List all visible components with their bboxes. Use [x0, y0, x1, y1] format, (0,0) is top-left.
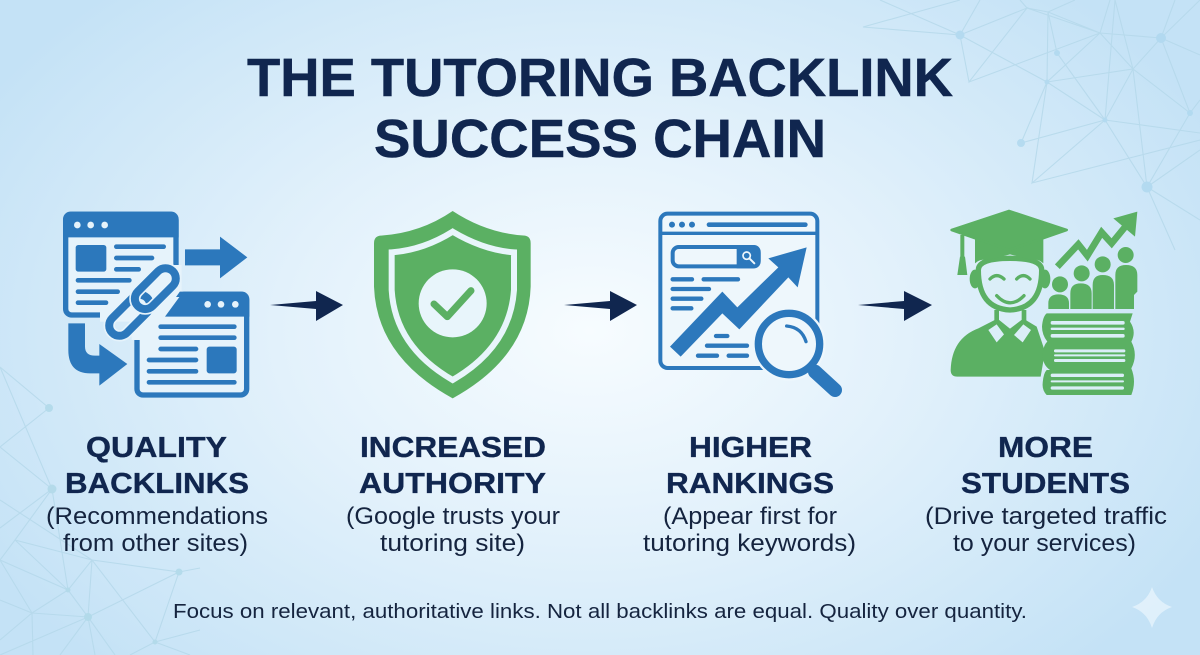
label: increased authority: [346, 432, 560, 557]
panel: quality backlinks: [46, 212, 268, 557]
arrow 1: [270, 291, 343, 321]
label: higher rankings: HIGHER: [689, 432, 812, 464]
panel: more students: [925, 211, 1167, 557]
label: higher rankings: RANKINGS: [666, 468, 834, 500]
title: SUCCESS CHAIN: [374, 109, 826, 169]
label: more students: to your services): [953, 530, 1136, 557]
footer note: Focus on relevant, authoritative links. Not all backlinks are equal. Quality over quantity.: [173, 601, 1027, 623]
icon: linked web pages: [63, 212, 249, 395]
title: THE TUTORING BACKLINK: [247, 48, 953, 108]
icon: search results with rising arrow: [660, 214, 835, 390]
label: higher rankings: (Appear first for: [663, 503, 837, 530]
label: quality backlinks: from other sites): [63, 530, 248, 557]
icon: sparkle: [1132, 587, 1172, 628]
panel: higher rankings: [643, 214, 856, 557]
label: increased authority: INCREASED: [360, 432, 546, 464]
arrow 2: [564, 291, 637, 321]
label: higher rankings: tutoring keywords): [643, 530, 856, 557]
network pattern: top right: [863, 0, 1200, 250]
label: more students: [925, 432, 1167, 557]
network pattern: bottom left: [0, 367, 200, 655]
label: increased authority: tutoring site): [380, 530, 525, 557]
label: more students: STUDENTS: [961, 468, 1130, 500]
label: more students: (Drive targeted traffic: [925, 503, 1167, 530]
icon: graduate, students, books and growth arrow: [951, 211, 1137, 395]
label: quality backlinks: [46, 432, 268, 557]
label: increased authority: AUTHORITY: [359, 468, 546, 500]
label: increased authority: (Google trusts your: [346, 503, 560, 530]
label: higher rankings: [643, 432, 856, 557]
label: quality backlinks: BACKLINKS: [65, 468, 249, 500]
label: quality backlinks: QUALITY: [86, 432, 227, 464]
title: [247, 48, 953, 169]
panel: increased authority: [346, 211, 560, 557]
icon: shield with check: [374, 211, 531, 398]
label: more students: MORE: [998, 432, 1093, 464]
arrow 3: [858, 291, 932, 321]
label: quality backlinks: (Recommendations: [46, 503, 268, 530]
